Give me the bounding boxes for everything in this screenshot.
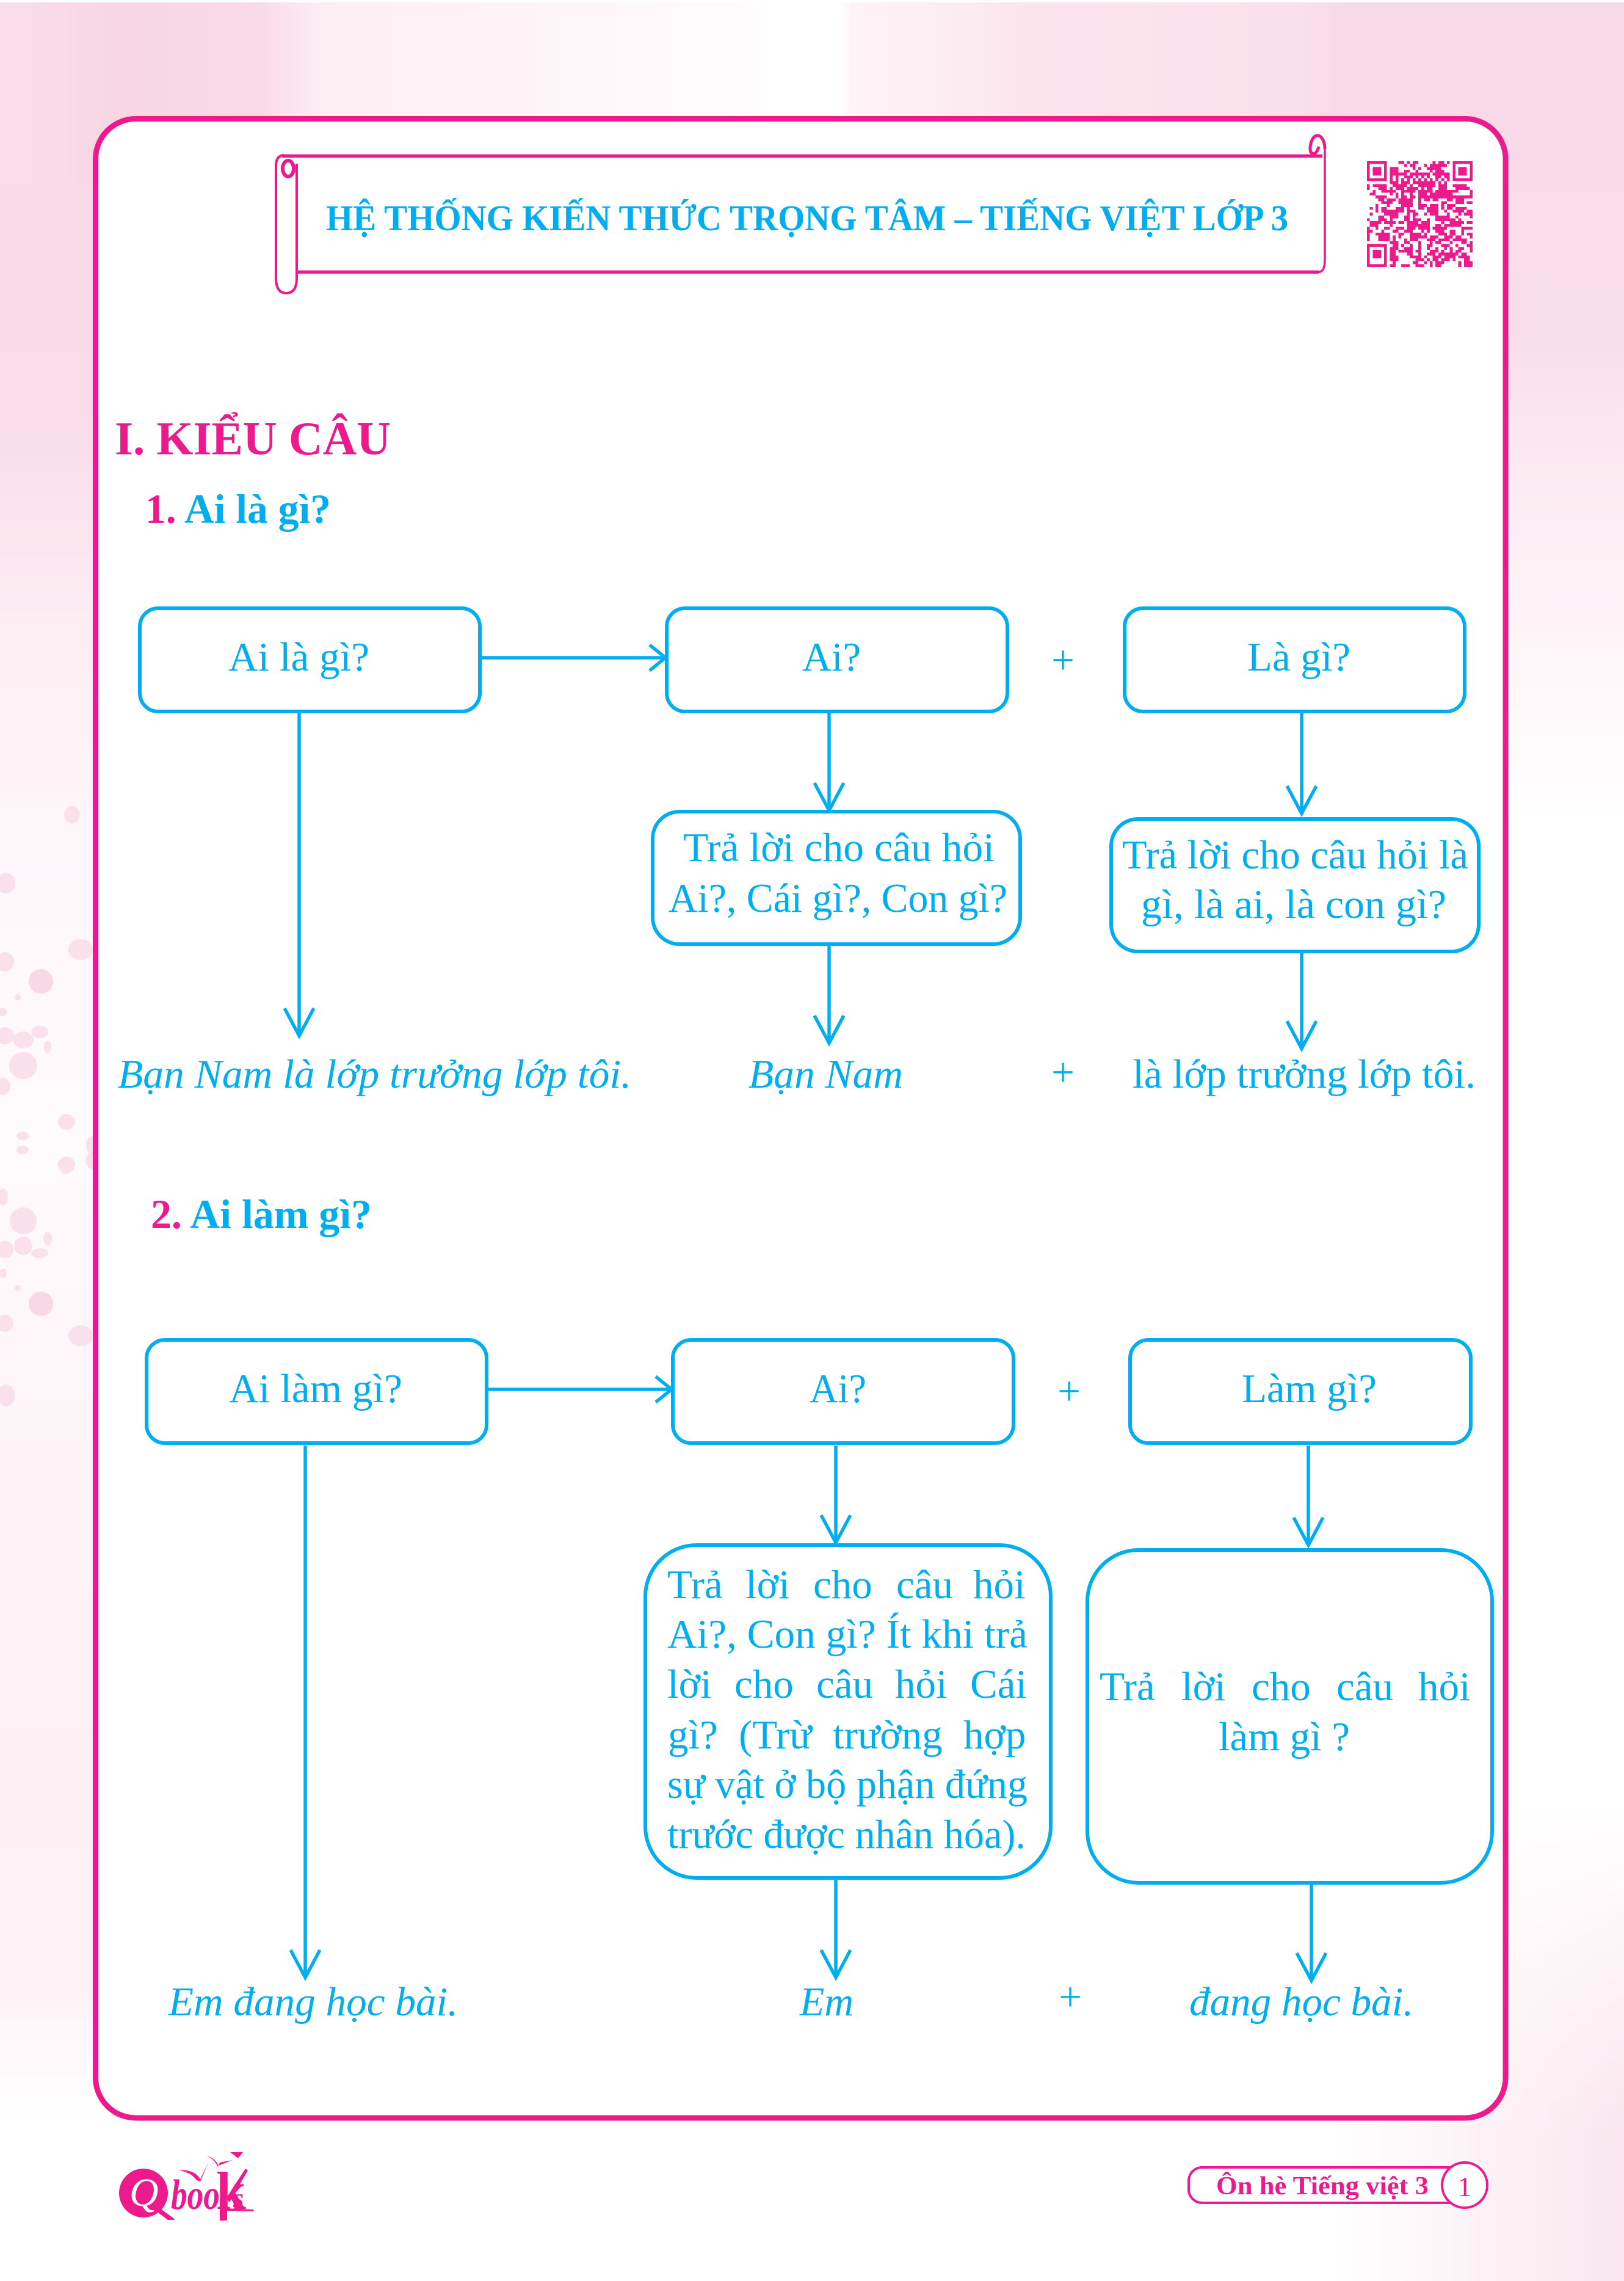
example sentence row: Bạn Nam là lớp trưởng lớp tôi. [118,1052,631,1097]
box: Làm gì?: Làm gì? [1242,1366,1377,1411]
arrow: down to example sentence [285,713,314,1036]
box: Ai description: Trả [667,1562,723,1607]
box: Ai là gì? [140,608,480,711]
box: Ai? [667,608,1007,711]
flowchart 1: Ai là gì? [118,608,1479,1097]
arrow: Là gì? to description [1287,713,1316,813]
plus sign: + [1057,1369,1081,1414]
box: Ai description [653,812,1020,944]
logo: Qbooks: Q [129,2170,159,2215]
subheading: 2. Ai làm gì?: 2. Ai làm gì? [151,1191,372,1237]
heading: I. KIỂU CÂU: I. KIỂU CÂU [115,412,391,465]
example sentence row: Bạn Nam [749,1052,903,1097]
box: Là gì description [1111,819,1479,951]
logo: Qbooks: boo [171,2172,220,2219]
example sentence row [118,1050,1476,1097]
box: Ai description: Ai?, Cái gì?, Con gì? [669,876,1007,921]
plus sign: + [1051,638,1075,683]
box: Làm gì description: câu [1336,1664,1393,1709]
footer: book title pill and page number: Ôn hè Tiếng việt 3 [1216,2171,1429,2200]
box: Ai description: Cái [970,1662,1027,1707]
box: Ai?: Ai? [802,635,861,680]
arrow: to Ai? [482,645,665,671]
box: Là gì description: Trả lời cho câu hỏi là [1122,832,1468,878]
box: Ai description: gì? [668,1712,718,1758]
box: Ai description: Ai?, Con gì? Ít khi trả [667,1612,1028,1657]
box: Ai làm gì? [147,1340,487,1443]
banner title text: HỆ THỐNG KIẾN THỨC TRỌNG TÂM – TIẾNG VIỆT LỚP 3 [326,198,1288,238]
arrow: to Ai? [488,1377,672,1402]
arrow: Làm gì description to example [1297,1885,1326,1981]
box: Ai description [645,1545,1051,1878]
box: Ai description: câu [896,1562,953,1607]
subheading: 1. Ai là gì?: 1. Ai là gì? [145,486,331,532]
box: Ai làm gì?: Ai làm gì? [229,1366,402,1411]
arrow: Ai? to description [821,1446,850,1543]
flowchart 2: Ai làm gì? [147,1340,1492,2025]
logo: Qbooks: k [216,2162,246,2221]
box: Làm gì description: làm gì ? [1219,1714,1350,1759]
box: Làm gì description: cho [1252,1664,1311,1709]
logo: Qbooks [119,2152,254,2221]
box: Ai? [673,1340,1013,1443]
arrow: Ai description to example [814,945,844,1043]
arrow: Ai? to description [814,713,844,810]
box: Ai description: cho [813,1562,872,1607]
example sentence row: là lớp trưởng lớp tôi. [1133,1052,1476,1097]
arrow: down to example sentence [291,1446,320,1977]
example sentence row: đang học bài. [1189,1979,1413,2025]
arrow: Ai description to example [821,1880,850,1977]
logo: Qbooks: s [233,2183,244,2213]
box: Ai description: trước được nhân hóa). [667,1812,1026,1857]
arrow: Là gì description to example [1287,953,1316,1049]
footer: book title pill and page number [1189,2163,1487,2208]
example sentence row: Em [799,1979,854,2025]
example sentence row [168,1974,1413,2025]
box: Ai description: sự vật ở bộ phận đứng [667,1762,1028,1807]
page number circle [1442,2163,1487,2208]
box: Làm gì description: Trả [1100,1664,1155,1709]
box: Ai description: lời [667,1662,712,1707]
example sentence row: Em đang học bài. [168,1979,458,2025]
banner: scroll title [276,136,1325,293]
panel: main rounded frame [95,118,1506,2118]
box: Ai description: trường [833,1712,943,1758]
box: Ai description: hỏi [973,1562,1026,1607]
arrow: Làm gì? to description [1294,1446,1323,1545]
box: Làm gì description [1087,1550,1492,1883]
example sentence row: + [1051,1050,1075,1095]
box: Ai description: cho [734,1662,794,1707]
box: Làm gì description: lời [1181,1664,1226,1709]
box: Ai description: hỏi [895,1662,948,1707]
box: Ai description: lời [745,1562,790,1607]
box: Làm gì? [1130,1340,1471,1443]
box: Ai?: Ai? [810,1366,866,1411]
box: Ai description: (Trừ [739,1712,813,1758]
icon: QR code [1367,162,1473,266]
box: Ai description: câu [816,1662,873,1707]
box: Là gì?: Là gì? [1247,635,1350,680]
box: Làm gì description: hỏi [1418,1664,1471,1709]
example sentence row: + [1059,1974,1082,2020]
box: Ai description: hợp [963,1712,1026,1758]
box: Ai là gì?: Ai là gì? [228,635,369,680]
box: Là gì? [1125,608,1465,711]
page number circle: 1 [1458,2171,1471,2202]
box: Ai description: Trả lời cho câu hỏi [683,825,995,870]
box: Là gì description: gì, là ai, là con gì? [1141,882,1446,927]
